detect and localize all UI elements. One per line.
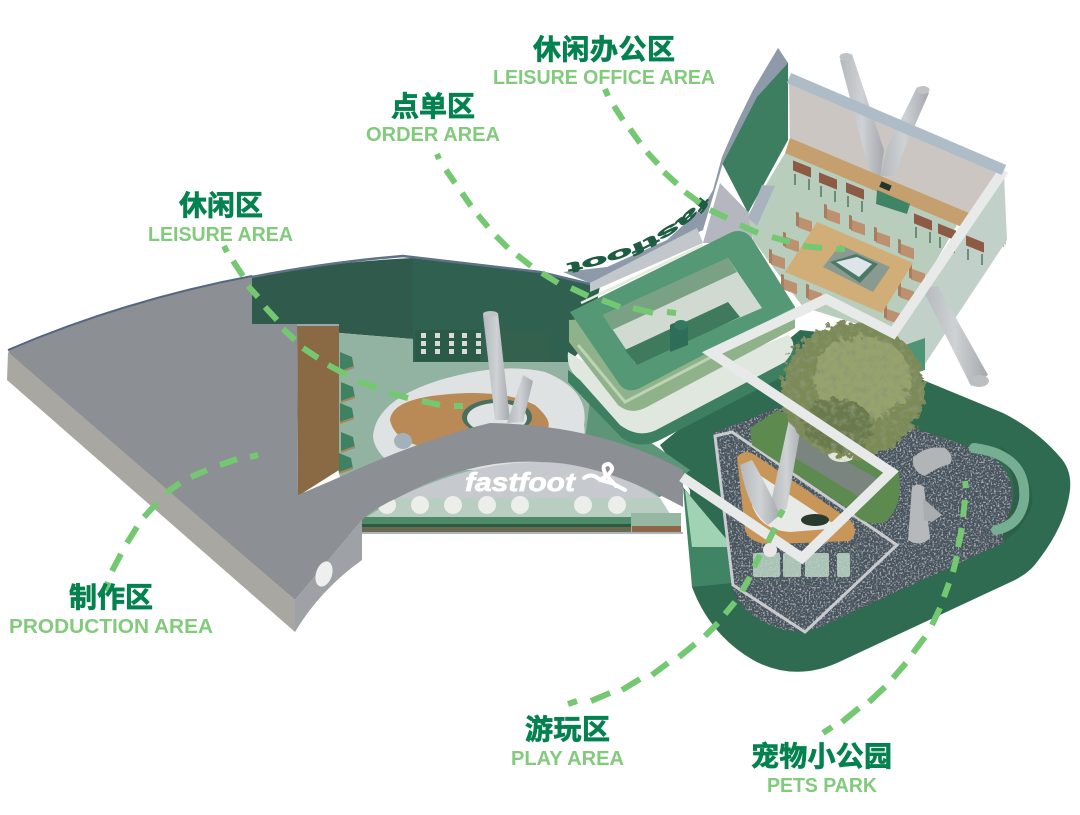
label: order area: 点单区 — [391, 91, 475, 122]
label: leisure office area: 休闲办公区 — [533, 34, 675, 65]
wall with blue edge — [563, 48, 788, 292]
fastfoot sign: fastfoot — [465, 467, 577, 497]
leader: order — [437, 154, 676, 313]
label: leisure office area: LEISURE OFFICE AREA — [493, 66, 715, 89]
leisure area floor — [297, 324, 690, 520]
label: production area: PRODUCTION AREA — [9, 615, 213, 638]
office columns — [840, 53, 930, 178]
park columns — [740, 415, 803, 557]
play plot outline — [715, 432, 897, 632]
tree — [781, 322, 925, 458]
label: order area: ORDER AREA — [366, 123, 500, 146]
lower right column — [922, 286, 989, 387]
pet park stones — [908, 447, 952, 544]
white glass frame — [682, 78, 1004, 558]
leader lines — [105, 89, 966, 733]
leader: leisure — [224, 246, 463, 406]
label: order area — [366, 91, 500, 146]
label: production area: 制作区 — [69, 582, 153, 613]
wooden triangle bench — [737, 452, 855, 544]
gravel garden — [713, 408, 1012, 632]
leader: play — [568, 510, 783, 704]
label: play area: 游玩区 — [525, 714, 610, 745]
label: pets park: PETS PARK — [767, 774, 877, 797]
label: production area — [9, 582, 213, 638]
order area block — [568, 231, 795, 445]
leader: production — [105, 455, 258, 591]
wooden wall panel — [297, 325, 339, 496]
storefront — [361, 462, 683, 534]
park ground — [660, 330, 1070, 672]
label: pets park: 宠物小公园 — [751, 741, 892, 772]
curved bench — [974, 446, 1032, 541]
ground signage blocks — [753, 553, 850, 577]
office conference table — [785, 222, 913, 313]
circular platform with wood table and columns — [373, 311, 585, 470]
leader: leisure office — [605, 89, 845, 249]
label: leisure area: 休闲区 — [179, 190, 263, 221]
shelf on back wall — [415, 330, 550, 361]
booth chairs — [339, 352, 355, 473]
plant — [801, 514, 829, 526]
production area roof — [7, 276, 683, 632]
lawn and pond — [750, 410, 900, 524]
label: leisure office area — [493, 34, 715, 89]
label: pets park — [751, 741, 892, 797]
curved wall lettering: fastfoot — [566, 197, 709, 273]
glass vestibule — [683, 487, 733, 587]
label: leisure area: LEISURE AREA — [148, 223, 293, 246]
label: play area: PLAY AREA — [511, 747, 624, 770]
label: play area — [511, 714, 624, 770]
leader: pets — [823, 481, 966, 733]
back wall — [252, 256, 600, 362]
fastfoot sign — [465, 464, 625, 497]
wall-side column — [748, 185, 775, 226]
label: leisure area — [148, 190, 293, 246]
office room — [748, 53, 1007, 378]
